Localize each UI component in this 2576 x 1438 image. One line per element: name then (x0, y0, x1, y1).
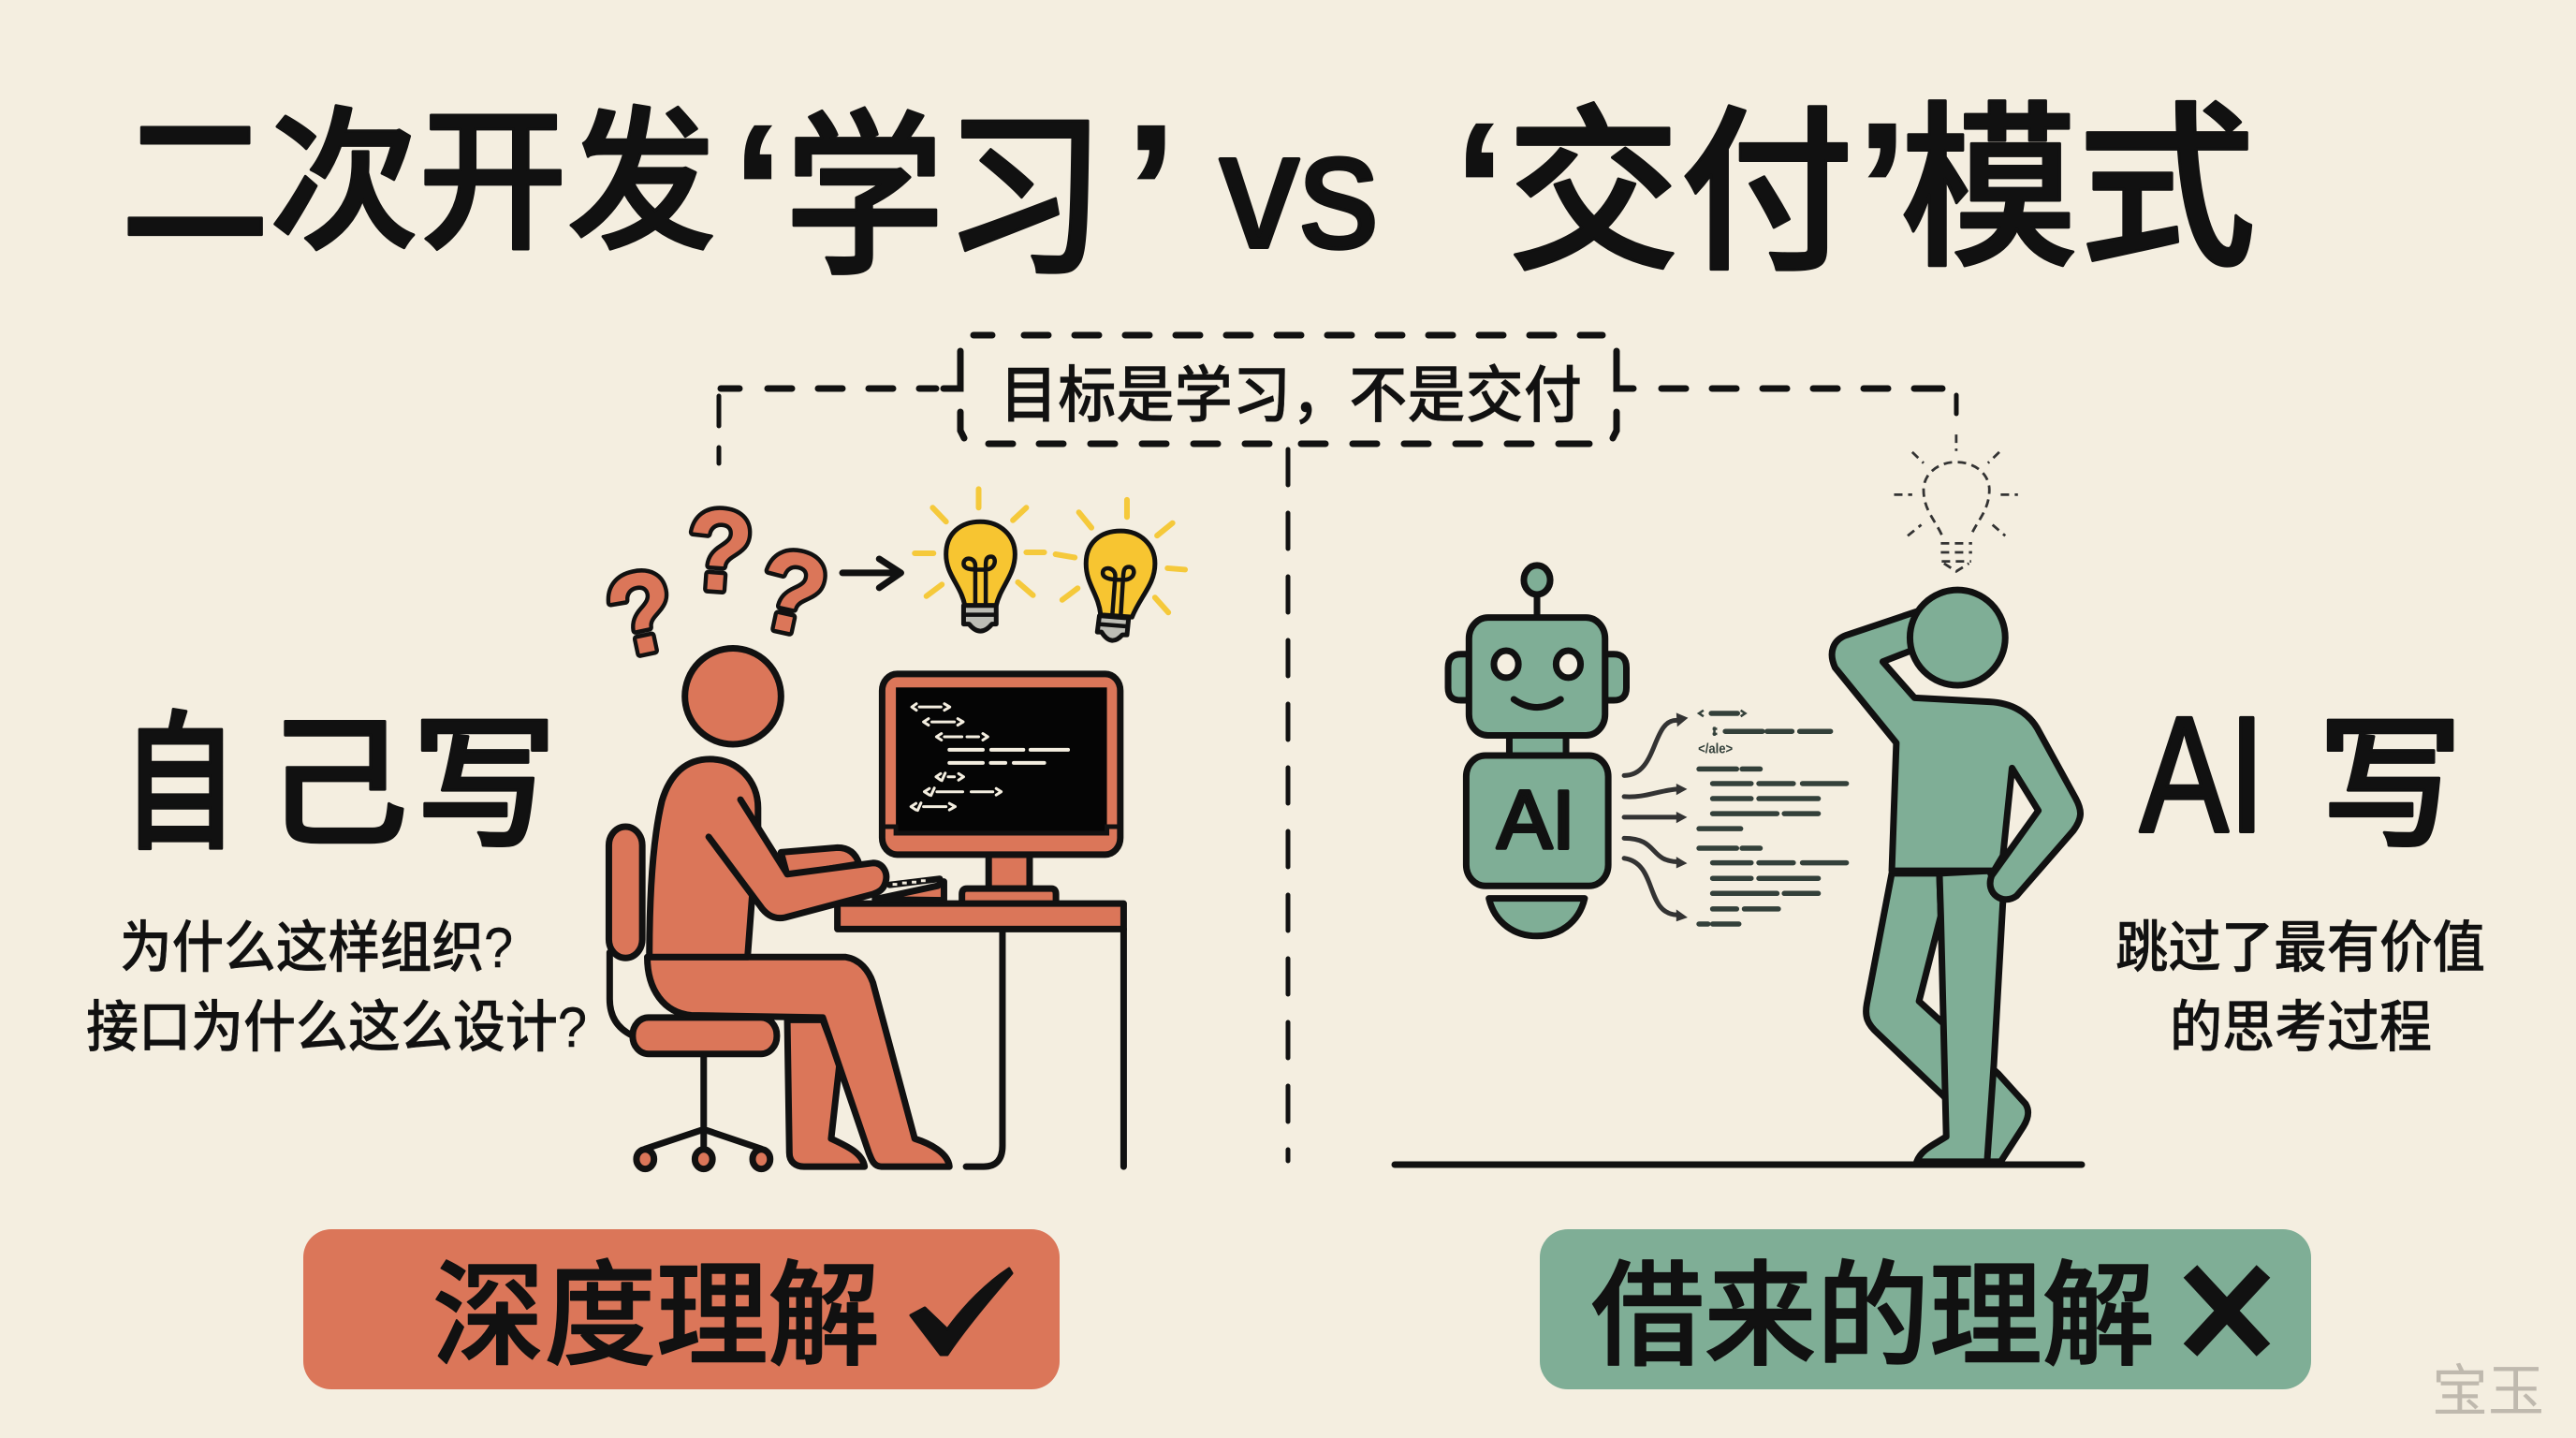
heading: self write: 己 (266, 705, 408, 864)
title: ‘ (732, 86, 784, 295)
badge: borrowed understanding: 借来的理解 (1591, 1253, 2155, 1380)
title: 二次开发 (121, 96, 716, 269)
robot chest label: AI (1497, 773, 1575, 866)
heading: AI write: AI (2140, 683, 2265, 867)
illustration: person at computer (608, 489, 1185, 1169)
dashed connector lines (719, 389, 1956, 1161)
central dashed callout box (944, 335, 1633, 444)
thigh and near leg (648, 957, 949, 1167)
heading: AI write (2140, 683, 2463, 867)
badge: deep understanding: 深度理解 (432, 1253, 880, 1380)
heading: self write: 自 (122, 701, 238, 869)
right description text (2115, 917, 2485, 1059)
arrow: questions to ideas (842, 559, 900, 588)
heading: self write: 写 (412, 704, 557, 866)
callout text: 目标是学习，不是交付 (1000, 360, 1582, 430)
icon: question marks (596, 485, 838, 682)
icon: lit bulb one (915, 489, 1045, 631)
icon: robot (1448, 565, 1627, 936)
left question text: 接口为什么这么设计? (86, 996, 587, 1059)
title: 模式 (1900, 91, 2256, 289)
far leg (787, 1020, 865, 1167)
icon: dashed idea bulb (1894, 434, 2018, 571)
chair seat (633, 1018, 777, 1054)
keyboard (875, 879, 944, 901)
icon: question marks: ? (596, 544, 687, 682)
far arm (781, 847, 859, 875)
icon: question marks: ? (747, 523, 838, 662)
desk (838, 903, 1123, 1167)
torso (650, 759, 758, 957)
screen code (912, 704, 988, 740)
icon: question marks: ? (682, 485, 757, 617)
right description text: 跳过了最有价值 (2115, 917, 2485, 979)
monitor (882, 674, 1120, 902)
title: 交付 (1507, 95, 1853, 293)
title: ’ (1856, 84, 1909, 293)
badge: deep understanding (303, 1229, 1060, 1389)
illustration: thinking person (1832, 434, 2081, 1162)
panel: left self-written (86, 485, 1185, 1169)
title: ‘ (1454, 84, 1506, 293)
ground line (1395, 1161, 2082, 1168)
heading: AI write: 写 (2318, 704, 2463, 866)
watermark: 宝玉 (2432, 1360, 2544, 1423)
panel: right AI-written (1395, 434, 2485, 1165)
near arm (709, 800, 886, 918)
right description text: 的思考过程 (2170, 996, 2432, 1059)
badge: borrowed understanding (1540, 1229, 2311, 1389)
head (685, 648, 781, 744)
standing leg (1917, 871, 2003, 1162)
icon: lit bulb two (1056, 500, 1185, 640)
icon: check mark (911, 1269, 1012, 1355)
left question text: 为什么这样组织? (120, 917, 513, 979)
title: 学习 (784, 99, 1105, 298)
title: ’ (1125, 86, 1178, 295)
AI generated code lines (1698, 711, 1847, 924)
AI generated code lines: </ale> (1698, 741, 1733, 756)
head (1910, 590, 2005, 685)
heading: self write (122, 701, 557, 869)
torso and arms (1832, 611, 2081, 900)
title: vs (1220, 96, 1379, 283)
office chair (608, 827, 770, 1169)
back leg (1866, 873, 2028, 1162)
title (121, 84, 2256, 298)
arrows: robot generates code (1624, 712, 1688, 921)
left question text (86, 917, 587, 1059)
icon: cross mark (2190, 1271, 2263, 1350)
